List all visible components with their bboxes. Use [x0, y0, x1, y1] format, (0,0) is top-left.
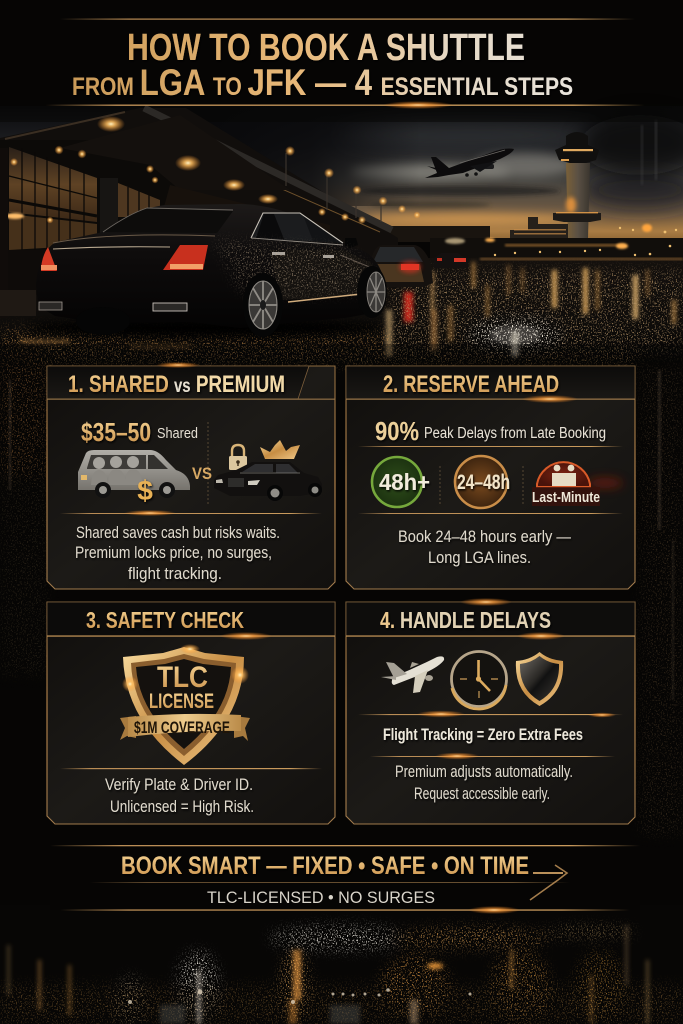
heading: 4. HANDLE DELAYS: [380, 607, 551, 633]
icon: shared van: [78, 450, 190, 506]
vertical reflection streaks: [7, 925, 649, 1024]
rain sparkle on road: [0, 270, 683, 354]
description: flight tracking.: [128, 565, 222, 583]
price label: Shared: [157, 425, 198, 442]
door handles: [272, 252, 285, 255]
description: Premium locks price, no surges,: [75, 544, 272, 562]
horizon lights on road edge: [480, 258, 683, 260]
divider line: [60, 513, 322, 514]
vs label: VS: [192, 464, 212, 483]
description: Long LGA lines.: [428, 548, 531, 567]
dark sky over terminal: [180, 106, 420, 206]
callout: footer banner: [50, 845, 640, 914]
sill chrome: [288, 294, 361, 302]
divider: [207, 422, 209, 505]
icon: plane: [381, 656, 444, 693]
side windows: [251, 213, 343, 243]
description: Verify Plate & Driver ID.: [105, 776, 253, 794]
panel: 1 shared vs premium: [47, 362, 335, 589]
terminal roof canopy: [0, 108, 398, 258]
arrow: [530, 865, 567, 900]
headline: BOOK SMART — FIXED • SAFE • ON TIME: [121, 852, 529, 880]
trunk chrome: [53, 247, 170, 249]
heading: 2. RESERVE AHEAD: [383, 371, 559, 398]
sparkle: [0, 926, 683, 1024]
front wheel: [357, 266, 387, 318]
bright dots row: [128, 988, 472, 1004]
panel: 2 reserve ahead: [346, 366, 635, 589]
icon: TLC shield: [120, 644, 250, 765]
panel: 4 handle delays: [346, 598, 635, 824]
control tower: [553, 132, 601, 238]
storm clouds: [340, 115, 683, 225]
exhausts: [39, 302, 62, 310]
badge: 48h+: 48h+: [379, 469, 430, 495]
feature line: Flight Tracking = Zero Extra Fees: [383, 726, 583, 744]
heading: 3. SAFETY CHECK: [86, 607, 244, 633]
subline: TLC-LICENSED • NO SURGES: [207, 888, 435, 907]
badge: 48h+: [372, 457, 430, 507]
TLC: TLC: [157, 661, 208, 694]
header band: [346, 366, 635, 399]
rear taillights: [41, 247, 57, 271]
side panel shine: [270, 250, 379, 300]
top fade: [0, 104, 683, 122]
panel: 3 safety check: [47, 602, 335, 824]
street lamps: [285, 146, 420, 222]
panel frame: [346, 366, 635, 589]
ribbon: $1M COVERAGE: [134, 719, 230, 737]
footer reflections: [0, 905, 683, 1024]
LICENSE: LICENSE: [149, 690, 214, 713]
icon: premium car: [214, 462, 322, 501]
title block: [45, 18, 645, 109]
panel frame: [47, 366, 335, 589]
stat: 90%: [375, 416, 419, 446]
terminal ceiling lights: [10, 116, 366, 224]
description: Premium adjusts automatically.: [395, 763, 573, 781]
badge: last-minute: [532, 462, 623, 506]
background car: [370, 245, 433, 287]
icon: shield: [516, 652, 563, 706]
road reflections: [20, 262, 676, 356]
distant car: [434, 253, 468, 268]
rear window: [103, 208, 233, 233]
mirror: [345, 238, 358, 248]
hero photo: airport at night: [0, 104, 683, 364]
rear wheel: [243, 273, 283, 337]
header band: [47, 602, 335, 636]
stat label: Peak Delays from Late Booking: [424, 425, 606, 442]
icon: clock: [452, 652, 506, 709]
heading: 1. SHARED vs PREMIUM: [68, 371, 285, 398]
terminal glass facade: [0, 147, 160, 318]
lower photo fade: [0, 344, 683, 364]
rear hidden wheel: [76, 307, 130, 335]
side speckle behind panels: [0, 352, 683, 852]
panel frame: [47, 602, 335, 824]
sky: [0, 106, 683, 242]
black sedan: [25, 204, 387, 338]
badge: 24-48h: [455, 456, 510, 508]
icon: shared van: $: [137, 475, 153, 506]
ground shadow: [25, 318, 385, 338]
wet texture: [0, 352, 683, 835]
icon: crown: [260, 440, 300, 459]
panel frame: [346, 602, 635, 824]
description: Shared saves cash but risks waits.: [76, 524, 280, 542]
badge: 24-48h: 24–48h: [457, 471, 510, 494]
rain specks on car: [215, 240, 375, 296]
description: Unlicensed = High Risk.: [110, 798, 254, 816]
wet road: [0, 258, 683, 360]
price: $35–50: [81, 417, 151, 447]
badge: last-minute: Last-Minute: [532, 490, 600, 506]
title line 1: HOW TO BOOK A SHUTTLE: [127, 27, 525, 69]
distant skyline: [380, 217, 683, 260]
airplane: [425, 148, 514, 178]
title line 2: FROM LGA TO JFK — 4 ESSENTIAL STEPS: [72, 62, 573, 103]
description: Request accessible early.: [414, 785, 550, 803]
description: Book 24–48 hours early —: [398, 527, 571, 546]
icon: lock: [229, 445, 247, 470]
header band: [47, 366, 309, 399]
header band: [346, 602, 635, 636]
body: [36, 204, 385, 328]
